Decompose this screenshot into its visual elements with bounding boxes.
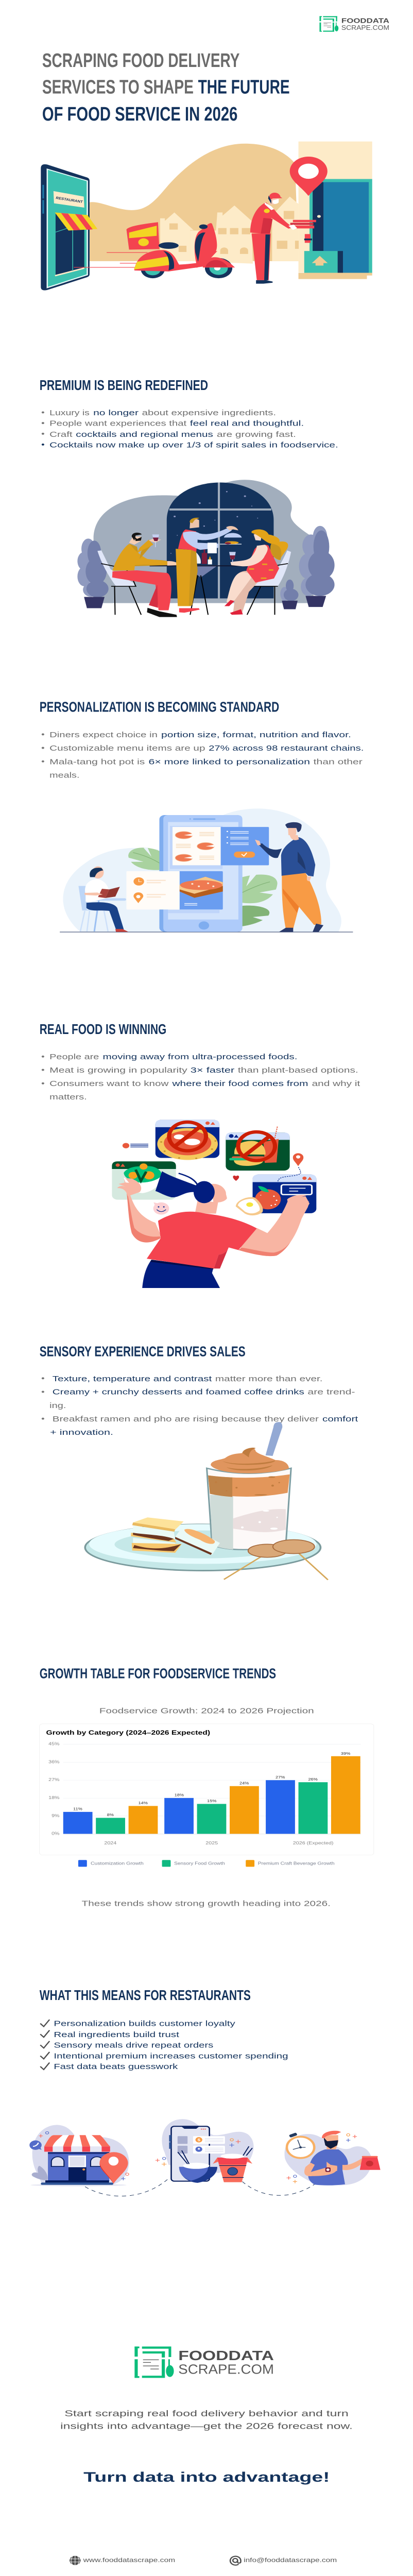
bullet list: and why it <box>312 1079 360 1088</box>
bullet list: 6× more linked to personalization <box>148 757 310 766</box>
list marker <box>123 1143 148 1148</box>
scooter <box>127 222 235 278</box>
chart subtitle: Foodservice Growth: 2024 to 2026 Projection <box>99 1707 314 1715</box>
panel: what this means for restaurants <box>29 1987 381 2196</box>
legend: Premium Craft Beverage Growth <box>258 1861 335 1866</box>
card: burger crossed out <box>226 1127 290 1171</box>
title <box>42 49 290 125</box>
illustration: delivery courier at door: RESTAURANT <box>55 196 83 204</box>
bullet list: meals. <box>49 771 79 779</box>
arched window <box>167 482 273 598</box>
waiter <box>176 518 242 613</box>
logo: FoodData Scrape: SCRAPE.COM <box>178 2362 274 2377</box>
bullet list: where their food comes from <box>171 1079 308 1088</box>
spoon <box>266 1422 282 1456</box>
bullet list: Texture, temperature and contrast <box>53 1375 212 1383</box>
egg toast <box>236 1197 263 1215</box>
bullet list: People are <box>49 1053 99 1061</box>
tagline: Turn data into advantage! <box>83 2469 330 2485</box>
bullet list: are growing fast. <box>217 430 296 438</box>
sandwich dessert <box>131 1517 220 1555</box>
bullet list: matter more than ever. <box>215 1375 323 1383</box>
value labels: 11% <box>73 1807 83 1811</box>
bullet list: portion size, format, nutrition and flavor. <box>161 731 351 739</box>
illustration: delivery courier at door <box>41 142 372 291</box>
houses <box>160 196 299 264</box>
dashed route <box>85 2178 316 2196</box>
bullet list: Customizable menu items are up <box>49 744 205 753</box>
table <box>150 548 248 615</box>
x axis labels <box>104 1841 334 1846</box>
bars <box>63 1756 360 1834</box>
heading: SENSORY EXPERIENCE DRIVES SALES <box>40 1343 246 1359</box>
logo: FoodData Scrape <box>319 16 389 32</box>
bullet list: Breakfast ramen and pho are rising because they deliver <box>53 1415 319 1423</box>
bullet list: cocktails and regional menus <box>76 430 213 438</box>
bullet list <box>42 1053 360 1101</box>
bullet list: Meat is growing in popularity <box>49 1066 187 1075</box>
courier <box>250 193 316 284</box>
illustration: fine dining couple <box>77 480 335 617</box>
caption: These trends show strong growth heading into 2026. <box>82 1899 331 1908</box>
heading: WHAT THIS MEANS FOR RESTAURANTS <box>40 1987 251 2003</box>
title: SERVICES TO SHAPE <box>42 76 194 98</box>
x axis labels: 2026 (Expected) <box>293 1841 334 1846</box>
card: pizza crossed out <box>156 1120 219 1160</box>
diner: man <box>97 533 180 617</box>
phone <box>159 815 243 932</box>
speed lines <box>74 252 147 267</box>
door <box>309 179 372 273</box>
y axis labels: 0% <box>51 1831 60 1836</box>
value labels <box>73 1752 351 1817</box>
illustration: food app order <box>156 2119 254 2183</box>
footer: email: info@fooddatascrape.com <box>244 2556 337 2564</box>
bullet list: ing. <box>49 1401 66 1410</box>
bullet list <box>42 1375 358 1436</box>
legend <box>78 1860 335 1867</box>
y axis labels: 27% <box>48 1777 60 1783</box>
value labels: 26% <box>308 1777 318 1782</box>
bullet list: moving away from ultra-processed foods. <box>102 1053 297 1061</box>
bullet list: Craft <box>49 430 73 438</box>
call to action text: Start scraping real food delivery behavior and turn <box>64 2409 349 2418</box>
bullet list: 3× faster <box>191 1066 235 1075</box>
bullet list: matters. <box>49 1093 87 1101</box>
value labels: 8% <box>107 1813 114 1817</box>
door step <box>299 273 372 279</box>
menu card <box>173 827 269 865</box>
phone <box>41 164 90 291</box>
checklist <box>40 2020 288 2071</box>
heading: REAL FOOD IS WINNING <box>40 1021 166 1037</box>
footer: email <box>230 2556 337 2565</box>
call to action text <box>60 2409 353 2431</box>
call to action text: insights into advantage—get the 2026 forecast now. <box>60 2421 353 2431</box>
bullet list: than other <box>314 757 363 766</box>
diner: woman <box>225 530 291 615</box>
logo: FoodData Scrape: FOODDATA <box>178 2348 274 2363</box>
bullet list: + innovation. <box>50 1428 113 1436</box>
value labels: 14% <box>139 1801 148 1805</box>
panel: growth table for foodservice trends <box>40 1665 374 1908</box>
background wall <box>299 142 372 273</box>
card: fruit with route <box>253 1153 316 1213</box>
illustration: woman choosing real food <box>112 1120 316 1288</box>
woman <box>117 1171 309 1288</box>
leaves <box>128 848 278 926</box>
glass <box>207 1468 291 1550</box>
y axis labels: 36% <box>48 1760 60 1765</box>
legend: Sensory Food Growth <box>174 1861 225 1866</box>
y axis labels: 9% <box>51 1814 60 1818</box>
man pointing <box>255 822 323 932</box>
checklist: Personalization builds customer loyalty <box>54 2020 235 2028</box>
woman reading menu <box>78 866 128 932</box>
background hill <box>89 144 299 261</box>
location pin <box>290 157 328 196</box>
panel: personalization is becoming standard <box>40 699 364 932</box>
x axis labels: 2024 <box>104 1841 117 1846</box>
plants <box>77 526 335 609</box>
bullet list: about expensive ingredients. <box>142 409 276 417</box>
checklist: Sensory meals drive repeat orders <box>54 2041 213 2049</box>
title: OF FOOD SERVICE IN 2026 <box>42 103 237 125</box>
bullet list: Consumers want to know <box>49 1079 169 1088</box>
bullet list: feel real and thoughtful. <box>190 419 304 428</box>
bullet list: Cocktails now make up over 1/3 of spirit sales in foodservice. <box>49 440 338 449</box>
bullet list: 27% across 98 restaurant chains. <box>209 744 364 753</box>
bullet list: Mala-tang hot pot is <box>49 757 145 766</box>
chart title: Growth by Category (2024–2026 Expected) <box>46 1730 210 1736</box>
value labels: 27% <box>276 1775 285 1780</box>
bullet list <box>42 731 364 779</box>
bullet list: Diners expect choice in <box>49 731 158 739</box>
checklist: Intentional premium increases customer spending <box>54 2052 288 2060</box>
bullet list: are trend- <box>307 1388 355 1396</box>
bullet list: comfort <box>322 1415 358 1423</box>
bullet list: than plant-based options. <box>238 1066 358 1075</box>
title: SCRAPING FOOD DELIVERY <box>42 49 239 71</box>
footer: website: www.fooddatascrape.com <box>82 2556 175 2564</box>
value labels: 18% <box>175 1793 184 1797</box>
value labels: 15% <box>207 1799 217 1803</box>
bar chart <box>40 1724 374 1855</box>
lollipop cookies <box>224 1540 328 1580</box>
bullet list <box>42 409 338 449</box>
illustration: ordering on phone menu <box>60 808 353 932</box>
foam <box>211 1448 289 1473</box>
footer: website <box>70 2556 175 2565</box>
logo: FoodData Scrape: SCRAPE.COM <box>341 25 389 31</box>
y axis labels <box>48 1742 60 1836</box>
illustration: food app order: $ <box>197 2138 200 2142</box>
title: THE FUTURE <box>198 76 290 98</box>
bullet list: no longer <box>93 409 139 417</box>
logo: FoodData Scrape: FOODDATA <box>341 18 389 25</box>
value labels: 39% <box>341 1752 351 1756</box>
card: salad <box>112 1161 176 1200</box>
value labels: 24% <box>239 1782 249 1785</box>
bullet list: People want experiences that <box>49 419 186 428</box>
plate <box>85 1524 320 1571</box>
panel: real food is winning <box>40 1021 360 1288</box>
panel: sensory experience drives sales <box>40 1343 358 1580</box>
panel: premium is being redefined <box>40 377 338 617</box>
y axis labels: 45% <box>48 1742 60 1747</box>
logo: FoodData Scrape <box>134 2347 274 2378</box>
x axis labels: 2025 <box>205 1841 218 1846</box>
illustration: restaurant storefront <box>29 2125 129 2187</box>
checklist: Fast data beats guesswork <box>54 2062 178 2071</box>
checklist: Real ingredients build trust <box>54 2030 179 2039</box>
heading: PREMIUM IS BEING REDEFINED <box>40 377 208 393</box>
panel: call to action and footer <box>60 2347 353 2565</box>
bullet list: Luxury is <box>49 409 90 417</box>
heart and smile icons <box>153 1176 239 1215</box>
bullet list: Creamy + crunchy desserts and foamed coffee drinks <box>53 1388 304 1396</box>
illustration: dalgona coffee and desserts <box>85 1422 328 1580</box>
legend: Customization Growth <box>91 1861 144 1866</box>
y axis labels: 18% <box>48 1795 60 1801</box>
illustration: fast delivery man <box>285 2131 381 2185</box>
order card <box>127 871 223 909</box>
panel: hero <box>41 16 389 291</box>
